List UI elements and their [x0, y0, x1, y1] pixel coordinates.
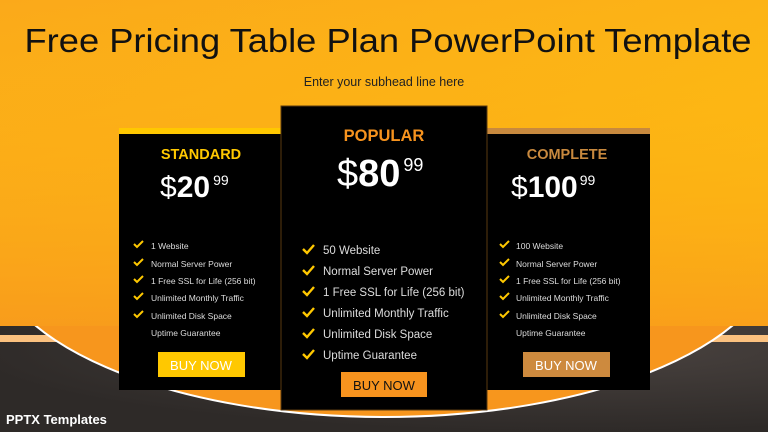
- panel: complete: 1 Free SSL for Life (256 bit): [516, 276, 621, 286]
- panel: standard: BUY NOW: [170, 358, 233, 373]
- panel: popular: [281, 106, 487, 410]
- panel: popular: Uptime Guarantee: [323, 350, 417, 362]
- panel: standard: Normal Server Power: [151, 259, 232, 269]
- panel: complete: [487, 128, 650, 390]
- panel: complete: Unlimited Disk Space: [516, 311, 597, 321]
- panel: complete: 99: [580, 172, 596, 188]
- panel: popular: 50 Website: [323, 245, 380, 257]
- panel: complete: COMPLETE: [527, 147, 608, 163]
- panel: standard: STANDARD: [161, 147, 241, 163]
- panel: popular: $80: [337, 153, 400, 195]
- footer label: PPTX Templates: [6, 412, 107, 427]
- panel: popular: 1 Free SSL for Life (256 bit): [323, 287, 465, 299]
- panel: standard: Unlimited Monthly Traffic: [151, 293, 245, 303]
- panel: complete: Normal Server Power: [516, 259, 597, 269]
- panel: popular: BUY NOW: [353, 378, 416, 393]
- panel: standard: 1 Website: [151, 241, 189, 251]
- panel: standard: 99: [213, 172, 229, 188]
- panel: standard: $20: [160, 171, 210, 204]
- panel: complete: 100 Website: [516, 241, 563, 251]
- panel: popular: POPULAR: [344, 127, 424, 145]
- title: Free Pricing Table Plan PowerPoint Template: [24, 22, 752, 59]
- subhead: Enter your subhead line here: [304, 75, 464, 89]
- panel: popular: Normal Server Power: [323, 266, 433, 278]
- panel: standard: Unlimited Disk Space: [151, 311, 232, 321]
- panel: standard: [119, 128, 281, 390]
- panel: popular: 99: [403, 155, 423, 175]
- panel: standard: 1 Free SSL for Life (256 bit): [151, 276, 256, 286]
- panel: complete: Unlimited Monthly Traffic: [516, 293, 610, 303]
- panel: complete: $100: [511, 171, 578, 204]
- panel: standard: Uptime Guarantee: [151, 328, 221, 338]
- panel: complete: BUY NOW: [535, 358, 598, 373]
- panel: complete: Uptime Guarantee: [516, 328, 586, 338]
- panel: popular: Unlimited Disk Space: [323, 329, 432, 341]
- panel: popular: Unlimited Monthly Traffic: [323, 308, 449, 320]
